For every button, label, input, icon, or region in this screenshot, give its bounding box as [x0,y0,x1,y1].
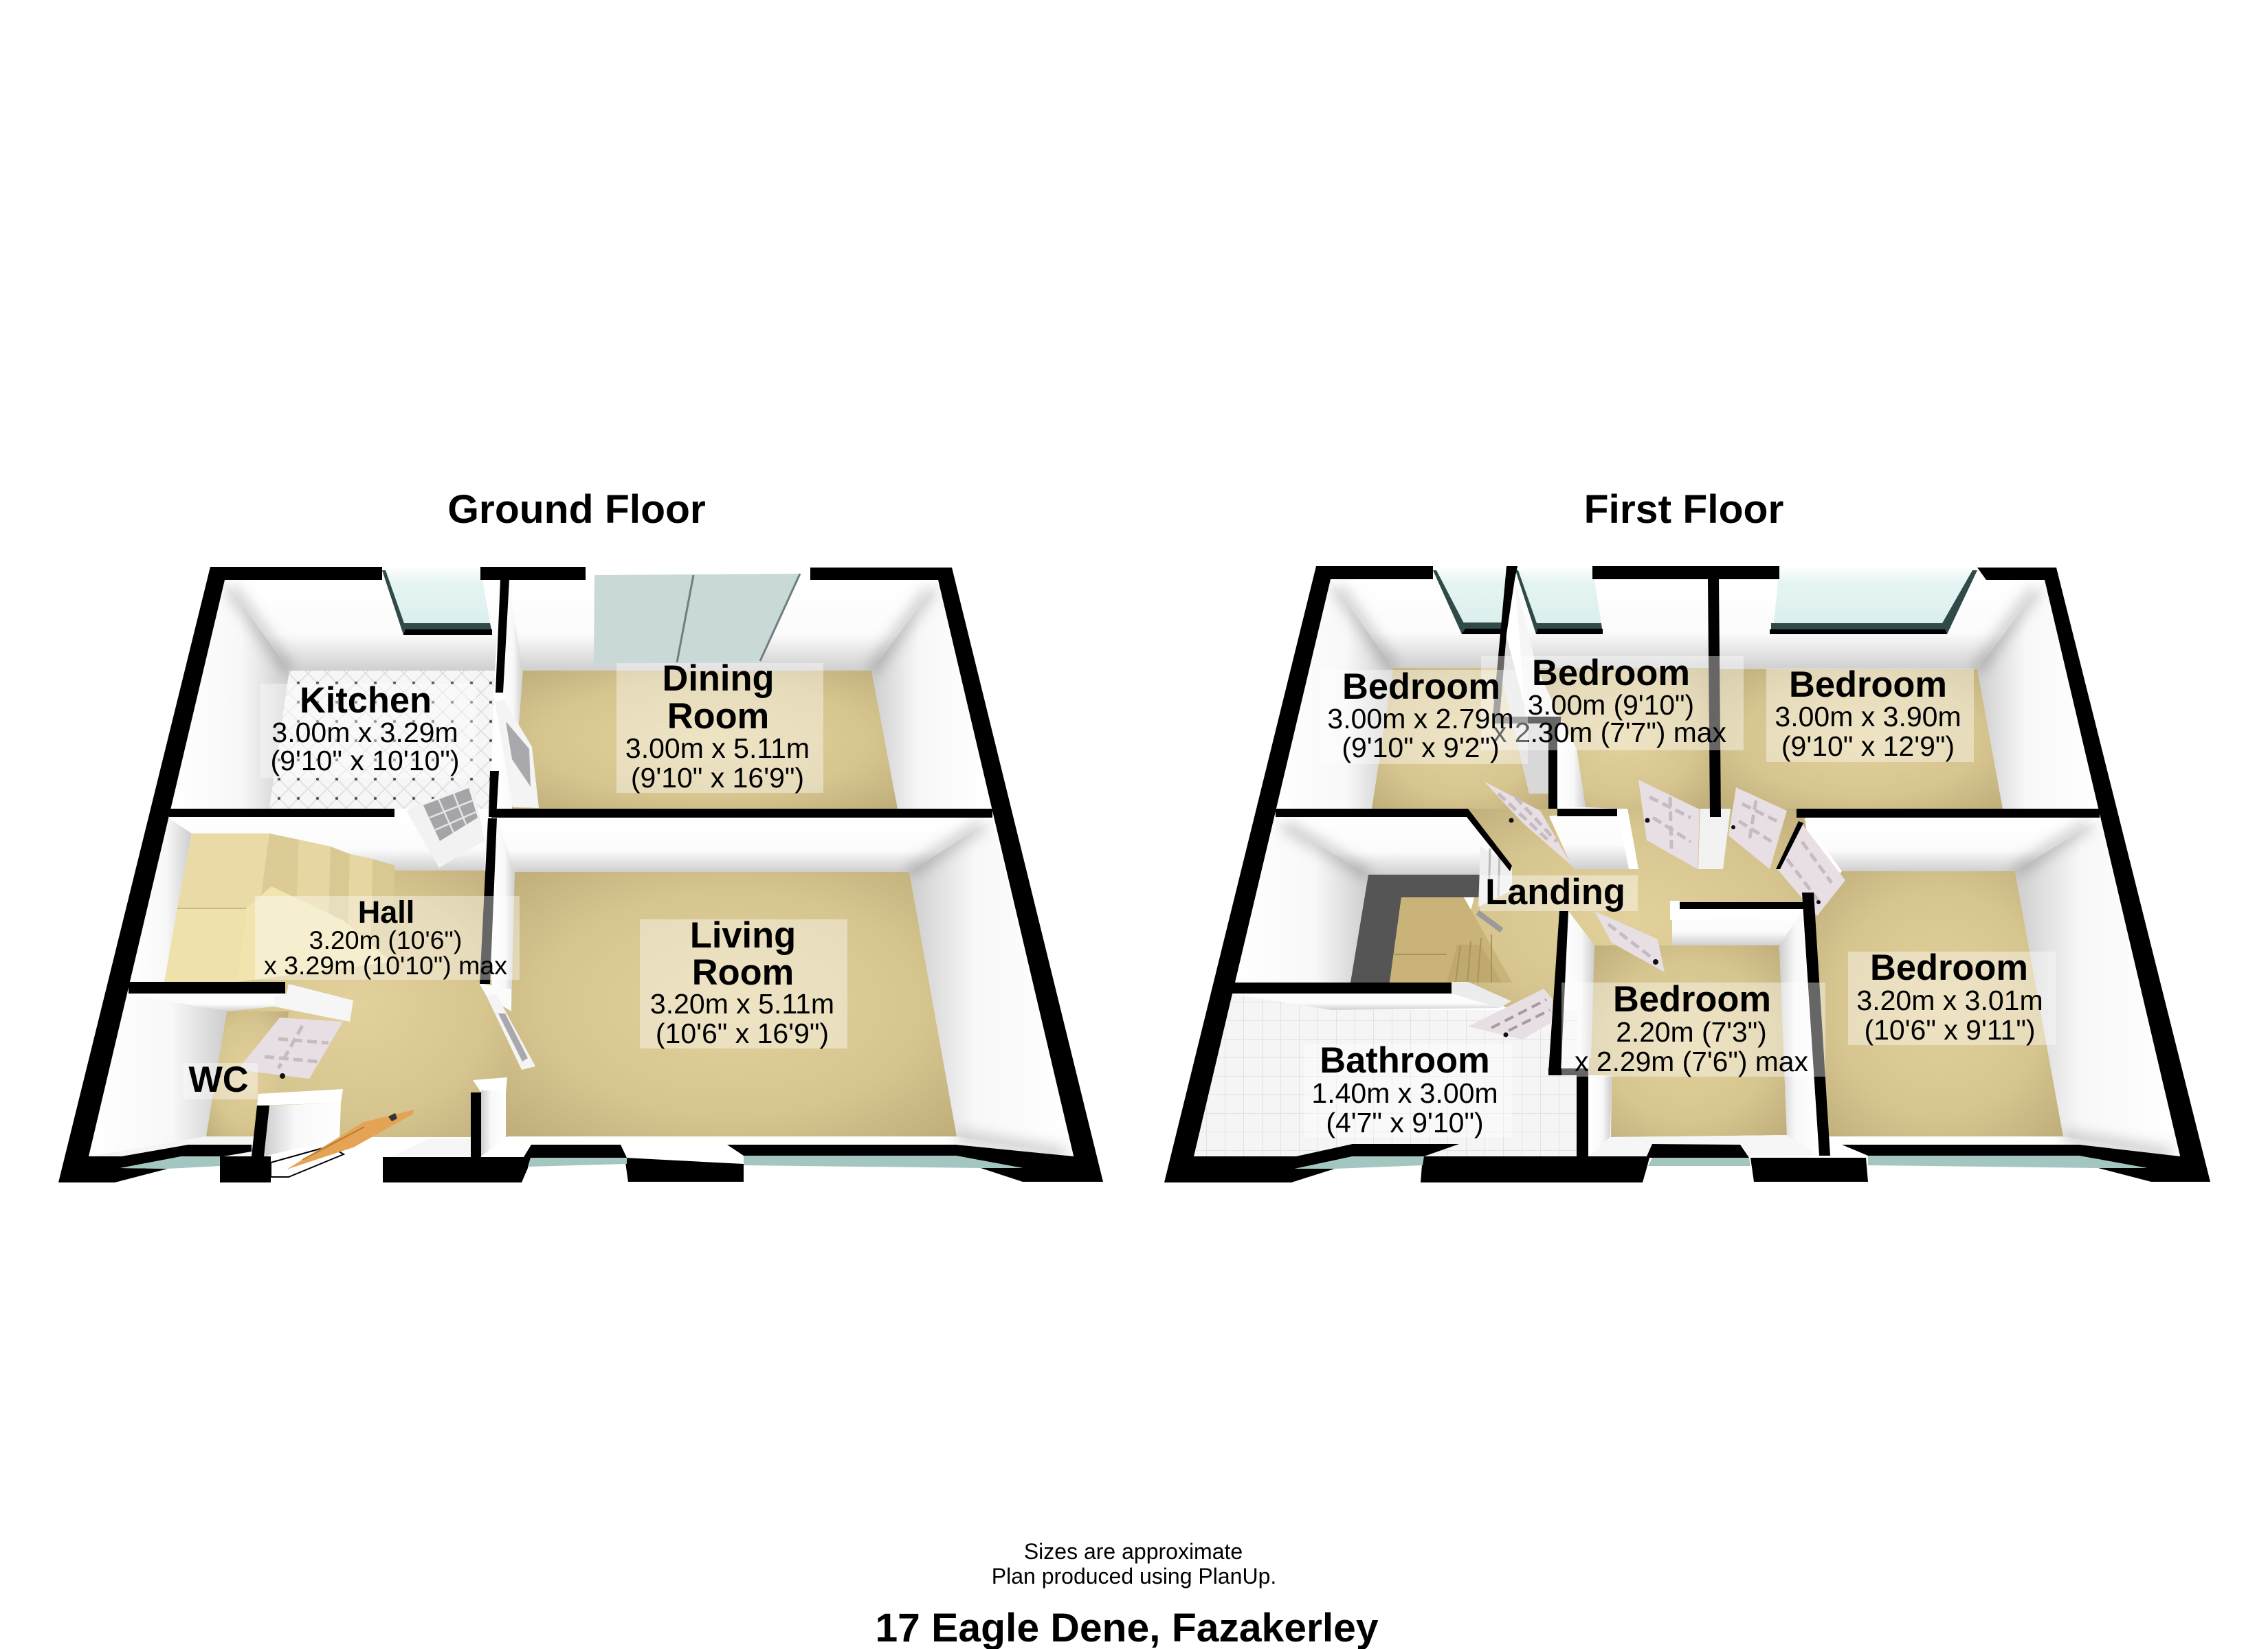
door: bedroom small front [1594,911,1665,972]
label: bedroom front left: 3.00m x 2.79m [1327,703,1514,734]
label: bedroom front left [1321,667,1528,764]
window: bedroom top middle [1514,567,1603,634]
room: bedroom small front [1561,901,1819,1156]
wall stubs: hall [257,984,507,1156]
windows: first floor front [1295,1156,2147,1169]
label: living room: (10'6" x 16'9") [656,1018,829,1049]
room: bathroom [1194,994,1577,1156]
stairs: hall [164,833,395,982]
label: bedroom small front: Bedroom [1613,980,1771,1020]
wall stub: central partition [1698,809,1731,869]
room: bedroom top middle [1515,579,1710,809]
label: dining room: Room [667,697,769,737]
label: kitchen [260,681,476,778]
front door [271,1110,414,1177]
sliding doors: dining room [594,574,800,665]
door: kitchen to dining [495,699,539,808]
room: kitchen [169,580,500,809]
label: bathroom: 1.40m x 3.00m [1311,1077,1498,1109]
label: bedroom front right: 3.20m x 3.01m [1856,985,2043,1016]
label: hall: x 3.29m (10'10") max [264,951,507,980]
room: bedroom top right [1719,579,2098,809]
label: dining room [616,659,823,794]
label: living room: 3.20m x 5.11m [650,988,834,1020]
window: bedroom top right [1770,567,1980,634]
room: dining room [499,580,992,809]
footer note: Plan produced using PlanUp. [992,1564,1276,1589]
label: bedroom top right: 3.00m x 3.90m [1775,701,1961,732]
label: bathroom [1304,1041,1512,1138]
door: wc [238,1018,343,1079]
label: bedroom top middle: Bedroom [1532,653,1690,693]
label: bedroom front right [1848,948,2056,1046]
label: living room: Living [690,916,796,956]
label: bedroom top middle: 3.00m (9'10") [1528,689,1694,721]
label: wc: WC [188,1060,249,1100]
label: bedroom front left: Bedroom [1342,667,1500,707]
label: bedroom top middle [1481,653,1744,750]
title: first floor: First Floor [1584,487,1783,532]
label: living room: Room [692,953,794,993]
windows: ground floor front [120,1156,1023,1169]
walls: first floor [1164,566,2210,1182]
label: dining room: (9'10" x 16'9") [631,762,804,794]
door: bedroom top right [1728,787,1787,869]
panel: first floor plan [1164,566,2210,1182]
label: bedroom front right: (10'6" x 9'11") [1864,1014,2036,1046]
label: living room [640,916,847,1049]
label: bedroom front left: (9'10" x 9'2") [1342,732,1500,763]
door: bedroom top middle [1638,780,1700,869]
wall cap: bathroom [1452,982,1511,1008]
label: dining room: Dining [663,659,774,699]
door: hall to living [479,983,535,1070]
label: hall: Hall [358,895,414,930]
label: bedroom top right [1766,665,1974,762]
walls: ground floor [58,567,1103,1182]
room: stair void [1235,818,1511,983]
label: dining room: 3.00m x 5.11m [625,732,810,764]
room: landing [1452,809,1814,1031]
room: bedroom front left [1276,579,1557,809]
label: kitchen: (9'10" x 10'10") [271,745,459,776]
label: bedroom small front: x 2.29m (7'6") max [1575,1046,1808,1077]
label: hall: 3.20m (10'6") [309,926,462,954]
room: hall [129,818,511,1137]
footer note [992,1539,1276,1589]
label: kitchen: Kitchen [300,681,432,721]
window: kitchen [379,567,492,635]
door: bedroom front left [1484,781,1572,866]
stairs: first floor [1390,846,1512,983]
title: ground floor: Ground Floor [447,487,706,532]
room: bedroom front right [1804,819,2180,1156]
label: kitchen: 3.00m x 3.29m [271,717,458,748]
door: kitchen to hall [406,781,485,868]
label: hall [255,895,520,980]
label: bedroom top right: Bedroom [1789,665,1947,705]
room: wc [89,994,289,1156]
label: bedroom small front [1561,980,1825,1077]
label: bathroom: (4'7" x 9'10") [1326,1107,1484,1138]
label: landing: Landing [1485,873,1625,912]
label: bedroom small front: 2.20m (7'3") [1616,1016,1767,1048]
wall stub: bedroom middle [1549,809,1638,869]
label: bedroom front right: Bedroom [1870,948,2028,988]
door: bathroom [1468,989,1553,1040]
window: bedroom front left [1431,567,1507,634]
door: bedroom front right [1777,821,1845,916]
room: living room [490,819,1074,1156]
panel: ground floor plan [58,567,1103,1182]
label: bathroom: Bathroom [1320,1041,1490,1081]
label: bedroom top right: (9'10" x 12'9") [1781,730,1955,762]
footer note: Sizes are approximate [1024,1539,1243,1564]
label: bedroom top middle: x 2.30m (7'7") max [1493,717,1726,748]
